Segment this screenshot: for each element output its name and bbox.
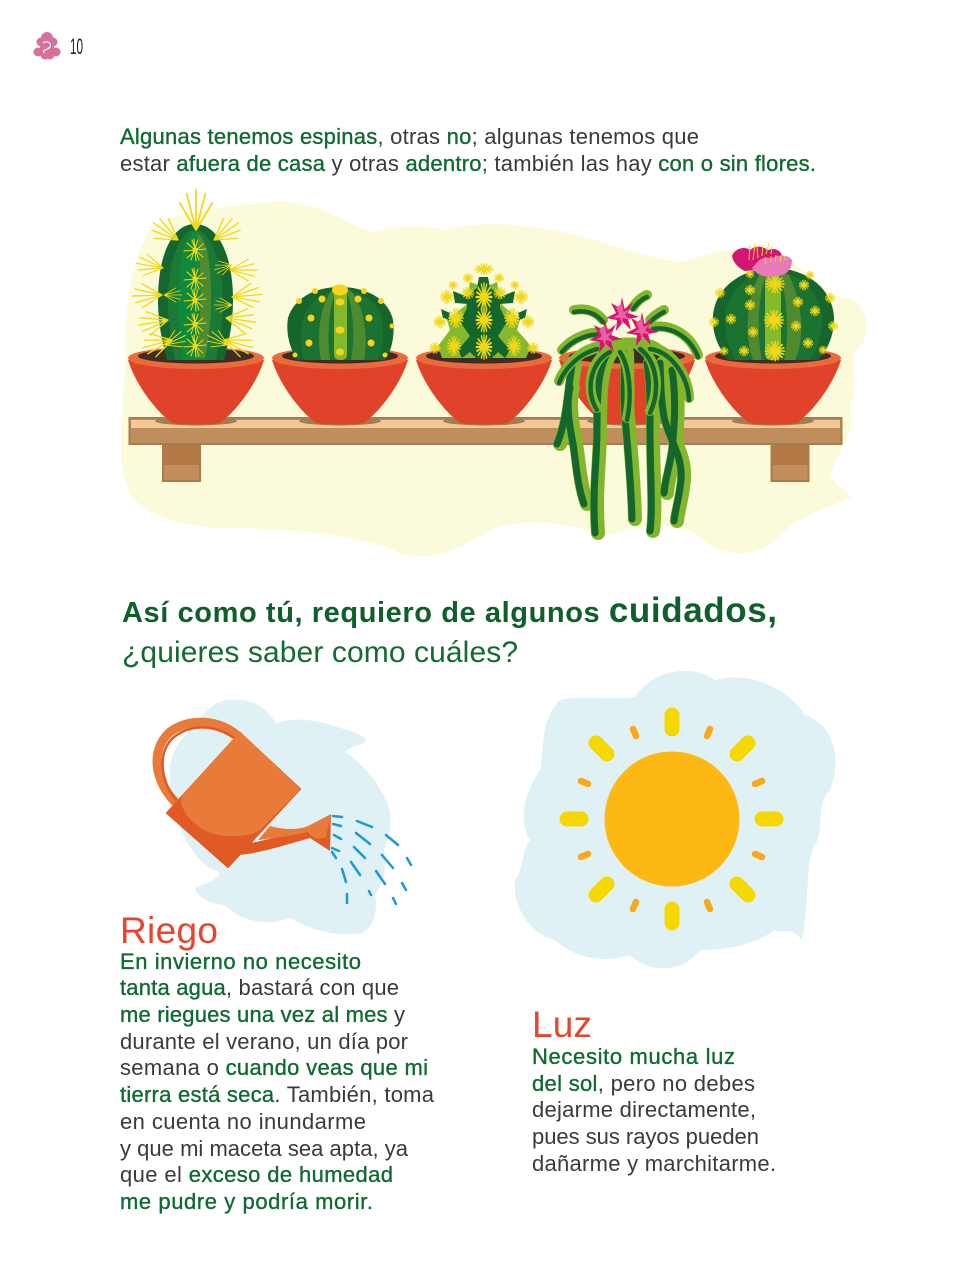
- illustration: sun: [515, 671, 836, 968]
- intro text: estar afuera de casa y otras adentro; también las hay con o sin flores.: [120, 151, 816, 176]
- body text: En invierno no necesito: [120, 949, 361, 974]
- body text: durante el verano, un día por: [120, 1029, 408, 1054]
- body text: y que mi maceta sea apta, ya: [120, 1136, 409, 1161]
- body text: [532, 1044, 776, 1176]
- illustration: watering can: [157, 700, 411, 935]
- body text: Necesito mucha luz: [532, 1044, 735, 1069]
- body text: semana o cuando veas que mi: [120, 1055, 428, 1080]
- handle: [157, 722, 238, 803]
- page number: [34, 32, 83, 60]
- title: Luz: Luz: [532, 1004, 592, 1045]
- body text: dañarme y marchitarme.: [532, 1151, 776, 1176]
- shelf: [130, 416, 842, 481]
- body text: en cuenta no inundarme: [120, 1109, 366, 1134]
- body text: me pudre y podría morir.: [120, 1189, 373, 1214]
- intro text: [120, 124, 816, 176]
- illustration: cacti on a shelf: [121, 190, 867, 556]
- pot: [705, 347, 841, 424]
- body text: tanta agua, bastará con que: [120, 975, 399, 1000]
- intro text: Algunas tenemos espinas, otras no; algunas tenemos que: [120, 124, 699, 149]
- body text: me riegues una vez al mes y: [120, 1002, 405, 1027]
- panel: riego: [120, 700, 435, 1214]
- pale yellow background blob: [121, 201, 867, 556]
- cactus 1: tall: [128, 190, 264, 424]
- cactus 4: hanging with flowers: [557, 295, 698, 533]
- pot: [416, 347, 552, 424]
- water drops: [332, 816, 411, 904]
- body text: tierra está seca. También, toma: [120, 1082, 435, 1107]
- heading: cuidados: ¿quieres saber como cuáles?: [122, 636, 518, 669]
- flower: [732, 243, 792, 277]
- pot: [272, 347, 408, 424]
- page number text: 10: [70, 34, 83, 59]
- cactus 2: round with yellow dots: [272, 284, 408, 424]
- cactus 5: round with flower: [705, 243, 841, 424]
- pot: [128, 347, 264, 424]
- pale blue blob: [170, 700, 391, 935]
- heading: cuidados: Así como tú, requiero de algunos cuidados,: [122, 591, 777, 630]
- body: [167, 733, 300, 867]
- body text: que el exceso de humedad: [120, 1162, 393, 1187]
- sun disc: [604, 752, 740, 886]
- body text: del sol, pero no debes: [532, 1071, 755, 1096]
- short rays: [581, 729, 762, 909]
- body text: dejarme directamente,: [532, 1097, 756, 1122]
- heading: cuidados: [122, 591, 777, 669]
- spout: [235, 814, 331, 855]
- icon: pink flower: [34, 32, 60, 60]
- body text: pues sus rayos pueden: [532, 1124, 759, 1149]
- pale blue blob: [515, 671, 836, 968]
- panel: luz: [515, 671, 836, 1176]
- body text: [120, 949, 435, 1214]
- long rays: [567, 715, 776, 923]
- title: Riego: Riego: [120, 910, 218, 951]
- cactus 3: zigzag: [416, 264, 552, 424]
- pot: [559, 347, 695, 424]
